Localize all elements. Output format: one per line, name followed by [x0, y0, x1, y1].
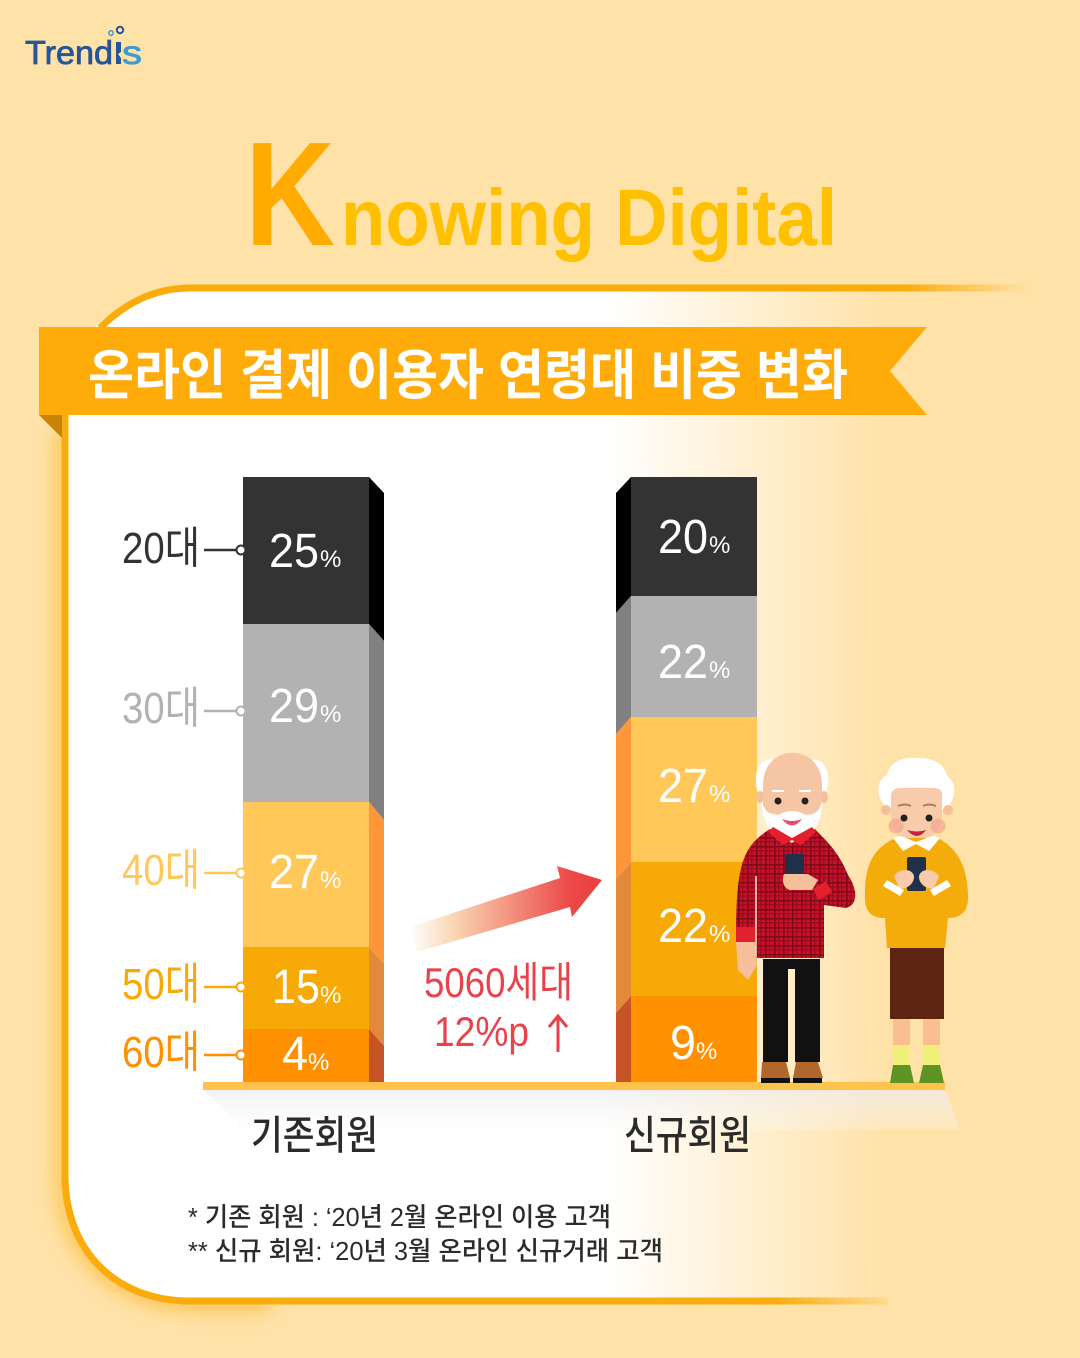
value labels: % — [709, 781, 730, 808]
value labels: % — [709, 657, 730, 684]
logo: Trendis: s — [122, 34, 142, 71]
footnotes — [188, 1202, 663, 1266]
value labels: % — [709, 921, 730, 948]
value labels: % — [696, 1038, 717, 1065]
value labels: % — [320, 701, 341, 728]
value labels: % — [320, 546, 341, 573]
age labels with leader lines: 50대 — [122, 960, 200, 1009]
value labels: % — [320, 867, 341, 894]
heading ribbon: 온라인 결제 이용자 연령대 비중 변화 — [88, 346, 848, 406]
axis label: existing members: 기존회원 — [251, 1114, 378, 1158]
title: Knowing Digital: K — [245, 112, 335, 277]
age labels with leader lines: 30대 — [122, 684, 200, 733]
axis label: new members: 신규회원 — [624, 1114, 751, 1158]
value labels: 27 — [658, 760, 708, 813]
logo: Trendis — [25, 27, 142, 71]
arrow: rising trend — [410, 866, 602, 952]
age labels with leader lines: 20대 — [122, 524, 200, 573]
icon: older man with phone — [736, 753, 855, 1083]
value labels — [269, 525, 341, 1081]
bar: existing members — [243, 477, 384, 1082]
value labels: 15 — [272, 961, 320, 1014]
age labels with leader lines — [122, 524, 246, 1077]
title: Knowing Digital — [245, 112, 837, 277]
value labels: 25 — [269, 525, 319, 578]
bar: new members — [616, 477, 757, 1082]
value labels: 9 — [670, 1017, 696, 1070]
callout: 5060 generation: 5060세대 — [424, 959, 573, 1006]
value labels: % — [709, 532, 730, 559]
panel: chart card — [56, 288, 1030, 1310]
value labels: % — [320, 982, 341, 1009]
age labels with leader lines: 60대 — [122, 1028, 200, 1077]
value labels: 29 — [269, 680, 319, 733]
value labels: % — [308, 1049, 329, 1076]
value labels: 4 — [282, 1028, 308, 1081]
baseline shadow — [203, 1089, 960, 1130]
footnotes: ** 신규 회원: ‘20년 3월 온라인 신규거래 고객 — [188, 1236, 663, 1266]
logo: Trendis: Trend — [25, 34, 113, 71]
callout: 5060 generation — [424, 959, 573, 1055]
footnotes: * 기존 회원 : ‘20년 2월 온라인 이용 고객 — [188, 1202, 611, 1232]
floor line — [203, 1082, 945, 1090]
heading ribbon — [39, 327, 927, 438]
value labels: 22 — [658, 636, 708, 689]
age labels with leader lines: 40대 — [122, 846, 200, 895]
value labels: 27 — [269, 846, 319, 899]
value labels — [658, 511, 730, 1070]
value labels: 22 — [658, 900, 708, 953]
title: Knowing Digital: nowing Digital — [341, 173, 837, 262]
value labels: 20 — [658, 511, 708, 564]
callout: 5060 generation: 12%p — [434, 1008, 529, 1055]
icon: older woman with phone — [865, 758, 968, 1083]
